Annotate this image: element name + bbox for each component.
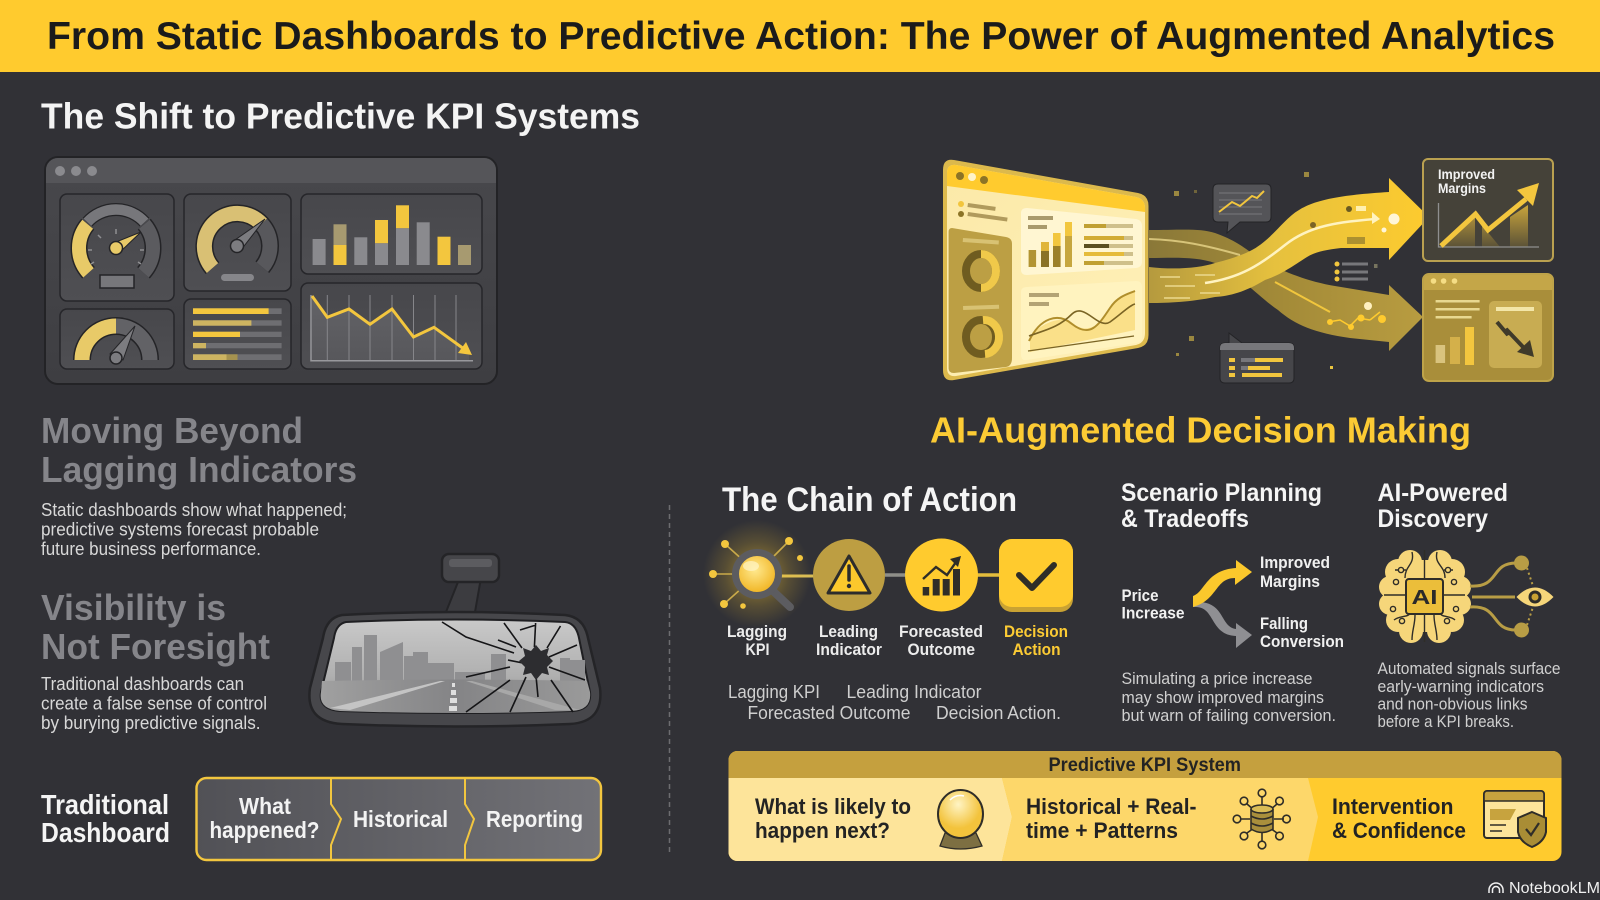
icon: leading indicator warning	[813, 539, 885, 611]
text block: discovery description: before a KPI breaks.	[1378, 712, 1514, 731]
callout: chart bubble	[1213, 184, 1271, 233]
text block: chain sequence: Decision Action.	[936, 703, 1061, 723]
arrow: downside path	[1149, 230, 1423, 351]
heading: scenario planning: & Tradeoffs	[1121, 505, 1249, 533]
label: forecasted outcome: Forecasted	[899, 623, 983, 641]
segment: historical and real-time: Historical + Real-	[1026, 794, 1196, 819]
icon: data network	[1233, 789, 1290, 849]
label: price increase	[1122, 587, 1184, 622]
text block: discovery description	[1378, 659, 1560, 731]
label: forecasted outcome: Outcome	[908, 641, 975, 659]
icon: AI brain with signals	[1379, 550, 1554, 643]
text block: static dashboards description: Static dashboards show what happened;	[41, 500, 347, 520]
illustration: cracked rear-view mirror	[309, 554, 600, 726]
heading: visibility is not foresight	[41, 587, 270, 667]
card: improved margins: Margins	[1438, 180, 1486, 196]
panel: small half gauge	[60, 309, 174, 369]
heading: visibility is not foresight: Visibility is	[41, 587, 226, 628]
arrow: improved margins	[1193, 560, 1252, 607]
label: lagging KPI: Lagging	[727, 623, 787, 641]
text block: false sense of control: Traditional dashboards can	[41, 674, 244, 694]
label: lagging KPI: KPI	[746, 641, 770, 659]
text block: discovery description: early-warning indicators	[1378, 677, 1544, 696]
text block: false sense of control: create a false sense of control	[41, 694, 267, 714]
heading: AI-powered discovery	[1378, 479, 1508, 533]
heading: moving beyond lagging indicators: Moving Beyond	[41, 410, 303, 451]
label: lagging KPI	[727, 623, 787, 659]
text block: scenario description: but warn of failing conversion.	[1122, 706, 1336, 725]
icon: confetti squares	[1174, 172, 1333, 369]
text block: scenario description: Simulating a price increase	[1122, 669, 1312, 688]
panel: yellow analytics window	[943, 160, 1148, 380]
illustration: static dashboard window	[45, 157, 497, 384]
text block: chain sequence: Forecasted Outcome	[748, 703, 910, 723]
traditional dashboard label	[41, 789, 170, 848]
heading: visibility is not foresight: Not Foresight	[41, 626, 270, 667]
heading: scenario planning: Scenario Planning	[1121, 479, 1322, 507]
card: improved margins	[1423, 159, 1553, 261]
label: falling conversion: Falling	[1260, 615, 1308, 633]
text block: scenario description	[1122, 669, 1336, 725]
label: forecasted outcome	[899, 623, 983, 659]
icon: AI brain with signals: AI	[1412, 587, 1438, 609]
label: decision action: Action	[1012, 641, 1060, 659]
text block: chain sequence: Leading Indicator	[846, 682, 982, 702]
label: price increase: Increase	[1122, 604, 1184, 622]
segment: historical and real-time	[1002, 778, 1318, 861]
step: what happened	[210, 793, 320, 843]
text block: static dashboards description: predictive systems forecast probable	[41, 520, 319, 540]
segment: intervention and confidence	[1332, 794, 1466, 843]
label: falling conversion	[1260, 615, 1344, 651]
text block: static dashboards description	[41, 500, 347, 559]
label: leading indicator: Leading	[819, 623, 878, 641]
text block: scenario description: may show improved margins	[1122, 688, 1324, 707]
label: decision action	[1004, 623, 1068, 659]
panel: declining line chart	[301, 283, 482, 369]
text block: static dashboards description: future business performance.	[41, 539, 261, 559]
text block: false sense of control	[41, 674, 267, 733]
arrow: improved path	[1149, 178, 1429, 303]
panel: bar chart	[301, 194, 482, 274]
step: reporting: Reporting	[486, 806, 583, 832]
label: leading indicator: Indicator	[816, 641, 883, 659]
panel: predictive KPI system	[728, 751, 1562, 861]
segment: historical and real-time: time + Patterns	[1026, 818, 1178, 843]
text block: discovery description: and non-obvious links	[1378, 694, 1528, 714]
heading: chain of action: The Chain of Action	[722, 481, 1017, 519]
diagram: scenario tradeoff arrows	[1122, 554, 1344, 651]
process bar: traditional dashboard	[196, 778, 601, 860]
title banner	[0, 0, 1600, 72]
panel: horizontal progress bars	[184, 299, 291, 369]
icon: crystal ball	[938, 790, 983, 849]
step: historical: Historical	[353, 806, 448, 832]
heading: scenario planning	[1121, 479, 1322, 533]
step: what happened: What	[239, 793, 291, 819]
heading: AI-powered discovery: Discovery	[1378, 505, 1488, 533]
arrow: falling conversion	[1193, 602, 1252, 648]
segment: what is likely: What is likely to	[755, 794, 911, 819]
text block: false sense of control: by burying predictive signals.	[41, 713, 260, 733]
label: improved margins: Margins	[1260, 573, 1320, 591]
label: falling conversion: Conversion	[1260, 633, 1344, 651]
label: improved margins: Improved	[1260, 554, 1330, 572]
callout: list bubble	[1220, 333, 1294, 383]
text block: discovery description: Automated signals surface	[1378, 659, 1560, 678]
diagram: chain of action	[703, 520, 1073, 659]
label: decision action: Decision	[1004, 623, 1068, 641]
label: price increase: Price	[1122, 587, 1158, 605]
text block: chain sequence: Lagging KPI	[728, 682, 820, 702]
segment: what is likely: happen next?	[755, 818, 890, 843]
heading: predictive KPI system: Predictive KPI System	[1048, 754, 1241, 776]
icon: document with shield	[1484, 791, 1546, 847]
icon: decision action check	[999, 539, 1073, 612]
icon: forecasted outcome chart	[905, 538, 978, 612]
segment: intervention and confidence: & Confidence	[1332, 818, 1466, 843]
heading: moving beyond lagging indicators: Lagging Indicators	[41, 449, 357, 490]
panel: dial gauge	[184, 194, 291, 291]
heading: AI-powered discovery: AI-Powered	[1378, 479, 1508, 507]
title banner: From Static Dashboards to Predictive Action: The Power of Augmented Analytics	[47, 15, 1555, 58]
step: what happened: happened?	[210, 817, 320, 843]
icon: lagging KPI magnifier	[703, 520, 811, 628]
label: improved margins	[1260, 554, 1330, 591]
card: falling conversion	[1423, 274, 1553, 381]
text block: chain sequence	[728, 682, 1061, 723]
panel: speedometer gauge	[60, 194, 174, 301]
traditional dashboard label: Dashboard	[41, 817, 170, 848]
icon: floating list	[1334, 262, 1378, 282]
segment: what is likely	[728, 778, 1012, 861]
divider line	[668, 505, 670, 855]
heading: AI-augmented decision making: AI-Augmented Decision Making	[930, 410, 1471, 450]
label: leading indicator	[816, 623, 883, 659]
traditional dashboard label: Traditional	[41, 789, 169, 820]
card: improved margins: Improved	[1438, 166, 1495, 182]
section heading: the shift: The Shift to Predictive KPI Systems	[41, 96, 640, 136]
illustration: AI-augmented decision flow	[943, 159, 1553, 383]
heading: moving beyond lagging indicators	[41, 410, 357, 490]
logo: NotebookLM: NotebookLM	[1509, 880, 1600, 897]
segment: intervention and confidence: Intervention	[1332, 794, 1454, 819]
